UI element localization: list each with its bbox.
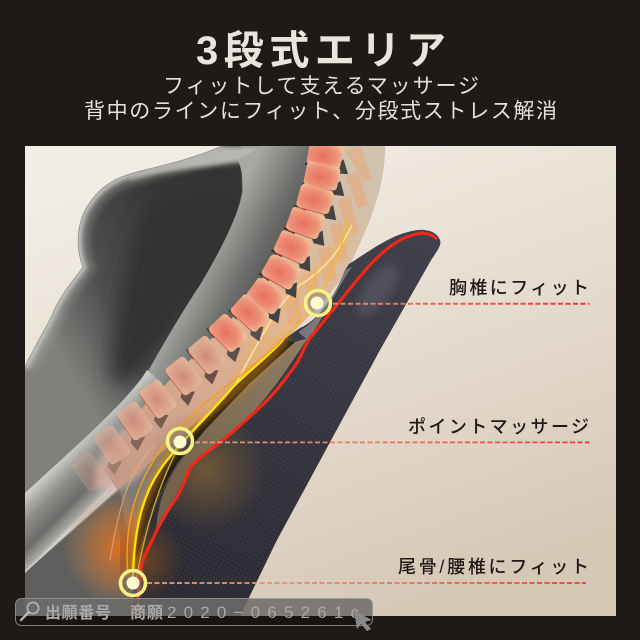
subtitle: 背中のラインにフィット、分段式ストレス解消 bbox=[84, 100, 557, 123]
marker: point massage bbox=[168, 428, 192, 454]
watermark bar bbox=[16, 598, 372, 631]
panel: illustration bbox=[25, 140, 616, 616]
watermark text: 2020−065261c bbox=[167, 603, 360, 622]
label: thoracic: 胸椎にフィット bbox=[449, 278, 589, 298]
label: point massage: ポイントマッサージ bbox=[408, 417, 589, 437]
watermark text: 出願番号 bbox=[45, 604, 111, 622]
title: 3段式エリア bbox=[196, 29, 446, 73]
heat glow lines bbox=[110, 217, 348, 583]
label: tailbone: 尾骨/腰椎にフィット bbox=[398, 557, 589, 577]
watermark text bbox=[45, 603, 360, 622]
leader line: tailbone bbox=[147, 582, 586, 584]
body outline bbox=[25, 146, 222, 367]
subtitle bbox=[84, 75, 557, 123]
pale curve under spine bbox=[235, 225, 352, 385]
leader line: thoracic bbox=[333, 303, 590, 305]
marker: thoracic bbox=[306, 290, 330, 316]
icon: magnifier bbox=[21, 602, 39, 620]
spine vertebrae bbox=[70, 140, 353, 493]
leader line: point massage bbox=[195, 441, 590, 443]
marker: tailbone bbox=[120, 570, 146, 596]
subtitle: フィットして支えるマッサージ bbox=[163, 75, 479, 98]
red piping bbox=[138, 233, 436, 616]
spinal processes bbox=[286, 146, 372, 326]
mesh insert bbox=[136, 338, 308, 560]
hip glow bbox=[66, 492, 143, 598]
watermark text: 商願 bbox=[130, 604, 163, 622]
seat pad bbox=[120, 230, 440, 616]
icon: cursor bbox=[354, 611, 372, 631]
translucent back tissue bbox=[105, 146, 385, 490]
body silhouette bbox=[25, 146, 385, 616]
